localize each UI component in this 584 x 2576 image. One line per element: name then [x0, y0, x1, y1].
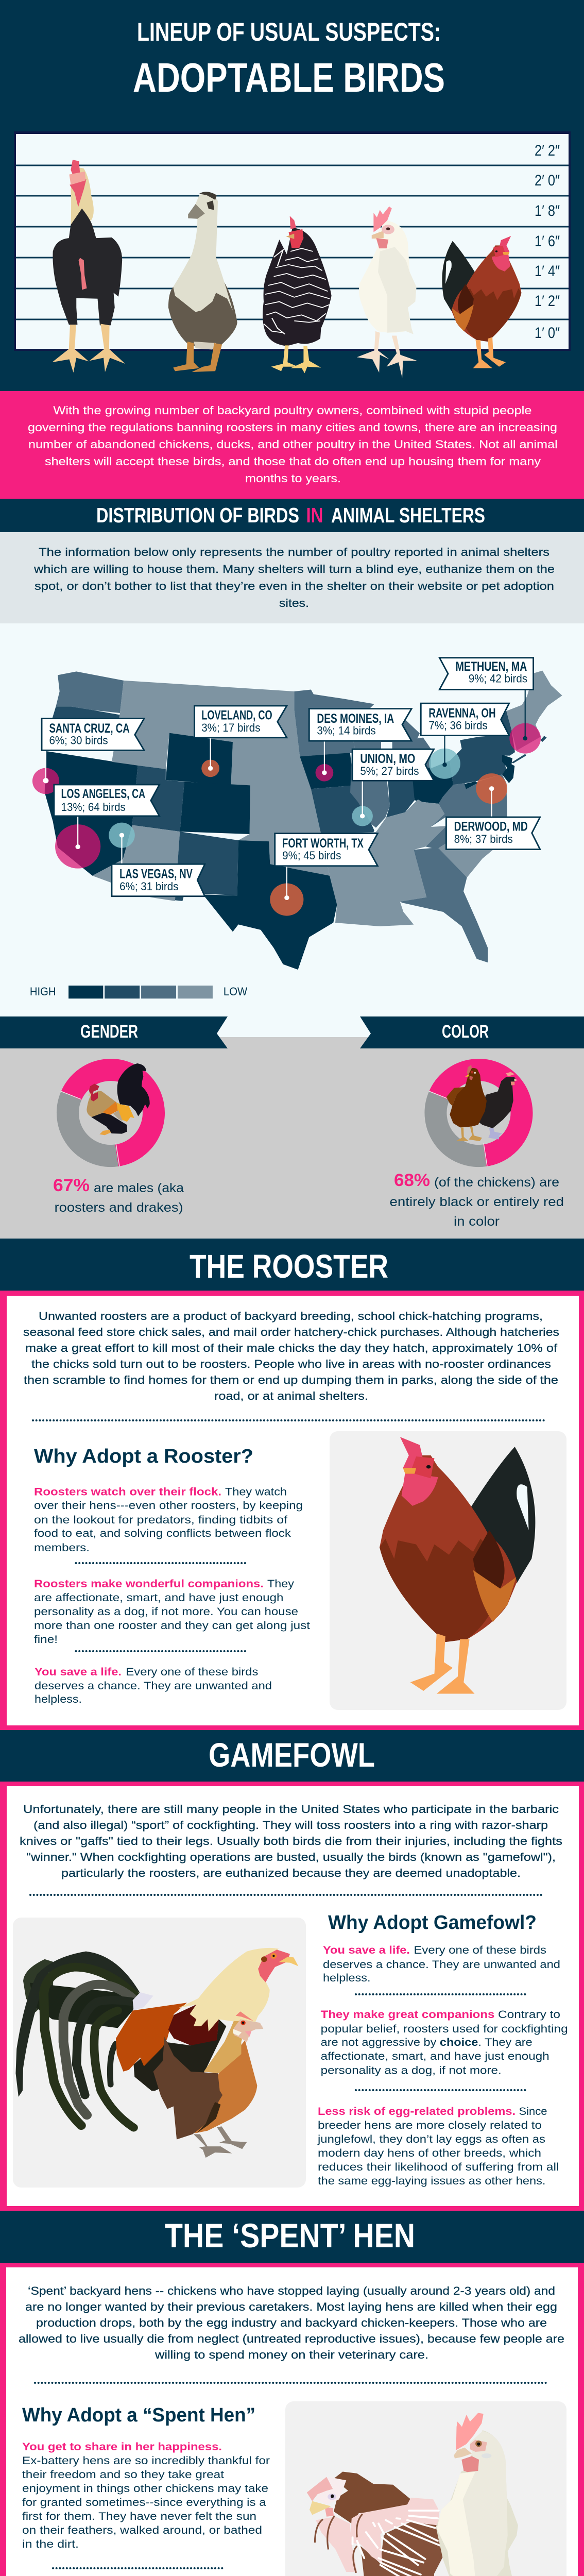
stat: color: entirely black or entirely red [389, 1195, 564, 1209]
rooster intro text: the chicks sold turn out to be roosters. People who live in areas with no-rooster ordinances [31, 1358, 551, 1370]
reason: save a life: Every one of these birds [414, 1944, 546, 1956]
spent hen intro text: ‘Spent’ backyard hens -- chickens who have stopped laying (usually around 2-3 years old) and [28, 2284, 555, 2297]
US map states [45, 671, 562, 970]
reason: watch over flock: food to eat, and solving conflicts between flock [34, 1528, 291, 1539]
reason: less egg problems: Since [519, 2106, 547, 2117]
illustration: spent hen [285, 2401, 566, 2576]
reason: share happiness: their freedom and so they take great [22, 2469, 224, 2481]
illustration: rooster [330, 1431, 566, 1710]
intro panel: governing the regulations banning roosters in many cities and towns, there are an increasing [28, 421, 557, 434]
label: Los Angeles: LOS ANGELES, CA [61, 787, 145, 801]
rooster intro text: then scramble to find homes for them or end up dumping them in parks, along the side of the [24, 1374, 558, 1386]
distribution intro text: The information below only represents the number of poultry reported in animal shelters [39, 546, 549, 558]
intro panel: shelters will accept these birds, and those that do often end up housing them for many [45, 455, 541, 468]
heading: gamefowl: GAMEFOWL [209, 1736, 375, 1774]
reason: share happiness: for granted sometimes--since everything is a [22, 2497, 266, 2509]
mugshot height chart: 1′ 4″ [535, 263, 560, 280]
reason: share happiness: on their feathers, walked around, or bathed [22, 2524, 262, 2536]
gamefowl intro text: "winner." When cockfighting operations are busted, usually the birds (known as "gamefowl"), [26, 1851, 556, 1863]
reason: save a life: deserves a chance. They are unwanted and [35, 1680, 272, 1692]
panel: gamefowl [0, 1782, 584, 2211]
mugshot height chart: 1′ 8″ [535, 202, 560, 219]
reason: save a life: You save a life. [35, 1666, 122, 1678]
heading: distribution [0, 499, 584, 532]
reason: less egg problems: modern day hens of other breeds, which [318, 2147, 541, 2159]
rooster intro text: Unwanted roosters are a product of backyard breeding, school chick-hatching programs, [39, 1310, 543, 1323]
reason: save a life [35, 1666, 272, 1705]
icon: red and black hens [446, 1065, 518, 1141]
reason: watch over flock: They watch [225, 1486, 287, 1498]
distribution intro text: spot, or don’t bother to list that they’re even in the shelter on their website or pet adoption [35, 580, 554, 592]
reason: share happiness [22, 2441, 270, 2550]
distribution intro text: sites. [279, 597, 309, 609]
stat: gender: roosters and drakes) [55, 1200, 183, 1215]
heading: color: COLOR [442, 1022, 489, 1042]
label: Des Moines: 3%; 14 birds [317, 724, 376, 737]
heading: gamefowl [0, 1730, 584, 1782]
label: Ravenna [421, 703, 509, 736]
title: ADOPTABLE BIRDS [133, 55, 445, 100]
bird: white hen [357, 207, 417, 378]
heading: why adopt a rooster: Why Adopt a Rooster? [34, 1446, 253, 1467]
heading: gender [0, 1016, 228, 1048]
reason: companions: personality as a dog, if not more. You can house [34, 1606, 298, 1618]
intro panel: With the growing number of backyard poultry owners, combined with stupid people [53, 404, 531, 417]
bubbles [32, 723, 541, 916]
spent hen intro text [19, 2284, 564, 2361]
title: LINEUP OF USUAL SUSPECTS: [137, 18, 441, 46]
distribution intro text: which are willing to house them. Many shelters will turn a blind eye, euthanize them on the [33, 563, 555, 575]
spent hen intro text: willing to spend money on their veterinary care. [154, 2348, 428, 2361]
bird: black rooster [52, 160, 125, 372]
illustration: gamefowl [13, 1918, 306, 2188]
heading: color [360, 1016, 584, 1048]
heading: gender: GENDER [80, 1022, 138, 1042]
reason: share happiness: You get to share in her happiness. [22, 2441, 222, 2453]
heading: the spent hen [0, 2211, 584, 2263]
reason: watch over flock [34, 1486, 303, 1554]
label: Union: UNION, MO [360, 752, 415, 766]
intro panel: months to years. [245, 472, 341, 485]
reason: great companions: popular belief, roosters used for cockfighting [321, 2023, 568, 2035]
label: Loveland [195, 706, 287, 738]
reason: save a life: helpless. [35, 1693, 82, 1705]
label: Loveland: LOVELAND, CO [201, 708, 272, 723]
lineup birds [52, 160, 521, 378]
reason: less egg problems: the same egg-laying issues as other hens. [318, 2175, 546, 2187]
US map overlays [30, 658, 541, 998]
spent hen intro text: are no longer wanted by their previous caretakers. Most laying hens are killed when their egg [25, 2300, 557, 2313]
label: Des Moines: DES MOINES, IA [317, 711, 394, 726]
reason: less egg problems: reduces their likelihood of suffering from all [318, 2161, 559, 2173]
reason: great companions: Contrary to [498, 2009, 560, 2021]
gamefowl intro text: Unfortunately, there are still many people in the United States who participate in the barbaric [23, 1803, 559, 1816]
reason: save a life: helpless. [323, 1972, 371, 1984]
bird: red rooster [442, 236, 521, 368]
heading: why adopt a spent hen: Why Adopt a “Spent Hen” [22, 2404, 255, 2426]
label: Methuen [439, 658, 534, 689]
gamefowl intro text [20, 1803, 562, 1879]
reason: less egg problems: Less risk of egg-related problems. [318, 2106, 516, 2117]
mugshot height chart: 1′ 6″ [535, 233, 560, 250]
label: Santa Cruz: 6%; 30 birds [49, 734, 108, 747]
reason: great companions: personality as a dog, if not more. [321, 2065, 502, 2076]
intro panel: number of abandoned chickens, ducks, and other poultry in the United States. Not all animal [28, 438, 558, 451]
reason: save a life: deserves a chance. They are unwanted and [323, 1959, 560, 1971]
stat: color: 68% [394, 1171, 430, 1190]
chart: gender donut [61, 1070, 153, 1166]
rooster intro text: make a great effort to kill most of their male chicks the day they hatch, approximately 10% of [25, 1342, 558, 1354]
rooster intro text: seasonal feed store chick sales, and mail order hatchery-chick purchases. Although hatcheries [23, 1326, 559, 1338]
label: Ravenna: RAVENNA, OH [428, 706, 496, 720]
reason: great companions: They make great companions [321, 2009, 494, 2021]
stat: color: in color [454, 1214, 500, 1229]
panel: spent hen [0, 2263, 584, 2576]
heading: distribution: ANIMAL SHELTERS [331, 503, 485, 527]
bird: barred hen [263, 216, 332, 373]
label: Las Vegas: LAS VEGAS, NV [119, 867, 193, 882]
rooster intro text: road, or at animal shelters. [214, 1389, 368, 1402]
reason: watch over flock: over their hens---even other roosters, by keeping [34, 1500, 303, 1512]
label: Los Angeles: 13%; 64 birds [61, 801, 126, 814]
gamefowl intro text: knives or "gaffs" tied to their legs. Usually both birds die from their injuries, including the fights [20, 1835, 562, 1848]
label: Methuen: 9%; 42 birds [469, 672, 527, 685]
map legend [30, 985, 247, 998]
reason: watch over flock: members. [34, 1542, 90, 1554]
stat: color: (of the chickens) are [434, 1175, 559, 1190]
icon: bantam rooster [87, 1063, 150, 1135]
label: Fort Worth: FORT WORTH, TX [282, 836, 364, 851]
reason: companions: fine! [34, 1634, 58, 1646]
reason: great companions: affectionate, smart, and have just enough [321, 2050, 549, 2062]
header background [0, 0, 584, 391]
title [133, 18, 445, 100]
map legend: LOW [224, 985, 247, 998]
label: Loveland: 3%; 17 birds [201, 721, 261, 734]
reason: share happiness: in the dirt. [22, 2538, 79, 2550]
mugshot height chart: 2′ 2″ [535, 142, 560, 159]
mugshot height chart [14, 131, 571, 351]
label: Las Vegas [112, 864, 205, 896]
stat: gender: are males (aka [94, 1181, 184, 1195]
map section background [0, 623, 584, 1037]
reason: watch over flock: on the lookout for predators, finding tidbits of [34, 1514, 287, 1526]
label: Des Moines [309, 709, 411, 741]
reason: save a life: You save a life. [323, 1944, 410, 1956]
label: Las Vegas: 6%; 31 birds [119, 880, 178, 893]
heading: the rooster [0, 1239, 584, 1291]
reason: great companions [321, 2009, 568, 2076]
reason: save a life: Every one of these birds [126, 1666, 258, 1678]
heading: distribution: IN [306, 503, 323, 527]
reason: share happiness: first for them. They have never felt the sun [22, 2511, 256, 2522]
stat: gender: 67% [53, 1176, 90, 1195]
reason: companions: Roosters make wonderful companions. [34, 1578, 264, 1590]
label: Union: 5%; 27 birds [360, 765, 419, 777]
pins [44, 689, 527, 900]
reason: share happiness: Ex-battery hens are so incredibly thankful for [22, 2455, 270, 2467]
gamefowl intro text: particularly the roosters, are euthanized because they are deemed unadoptable. [61, 1867, 521, 1879]
rooster intro text [23, 1310, 559, 1402]
chart: color donut [429, 1070, 522, 1166]
label: Fort Worth [275, 834, 377, 866]
reason: companions [34, 1578, 310, 1646]
map legend: HIGH [30, 985, 56, 998]
heading: distribution: DISTRIBUTION OF BIRDS [96, 503, 299, 527]
label: Santa Cruz [42, 719, 144, 750]
label: Derwood: 8%; 37 birds [454, 833, 513, 845]
label: Los Angeles [54, 785, 160, 816]
reason: companions: are affectionate, smart, and have just enough [34, 1592, 283, 1604]
reason: companions: They [267, 1578, 295, 1590]
stat: gender [53, 1176, 184, 1215]
reason: great companions: are not aggressive by choice . They are [321, 2037, 533, 2048]
reason: less egg problems: junglefowl, they don’t lay eggs as often as [317, 2133, 545, 2145]
heading: the spent hen: THE ‘SPENT’ HEN [165, 2216, 415, 2255]
reason: save a life [323, 1944, 560, 1984]
spent hen intro text: production drops, both by the egg industry and backyard chicken-keepers. Those who are [36, 2316, 547, 2329]
label: Union [352, 749, 434, 781]
mugshot height chart: 1′ 0″ [535, 325, 560, 342]
reason: companions: more than one rooster and they can get along just [34, 1620, 310, 1632]
stat: color [389, 1171, 564, 1229]
spent hen intro text: allowed to live usually die from neglect (untreated reproductive issues), because few people are [19, 2332, 564, 2345]
heading: why adopt gamefowl: Why Adopt Gamefowl? [328, 1912, 537, 1934]
reason: watch over flock: Roosters watch over their flock. [34, 1486, 221, 1498]
stats section background [0, 1037, 584, 1239]
bird: goose [168, 192, 237, 372]
label: Fort Worth: 9%; 45 birds [282, 849, 341, 862]
label: Santa Cruz: SANTA CRUZ, CA [49, 721, 130, 736]
mugshot height chart: 2′ 0″ [535, 172, 560, 189]
label: Methuen: METHUEN, MA [455, 659, 527, 674]
reason: less egg problems: breeder hens are more closely related to [318, 2120, 542, 2131]
mugshot height chart: 1′ 2″ [535, 293, 560, 310]
label: Derwood [446, 817, 540, 850]
panel: rooster [0, 1291, 584, 1730]
label: Derwood: DERWOOD, MD [454, 820, 528, 834]
gamefowl intro text: (and also illegal) “sport” of cockfighting. They will toss roosters into a ring with razor-sharp [33, 1819, 548, 1832]
intro panel [0, 391, 584, 499]
label: Ravenna: 7%; 36 birds [428, 719, 488, 732]
reason: share happiness: enjoyment in things other chickens may take [22, 2483, 268, 2495]
reason: less egg problems [317, 2106, 559, 2187]
distribution intro text [0, 532, 584, 623]
heading: the rooster: THE ROOSTER [190, 1248, 388, 1285]
